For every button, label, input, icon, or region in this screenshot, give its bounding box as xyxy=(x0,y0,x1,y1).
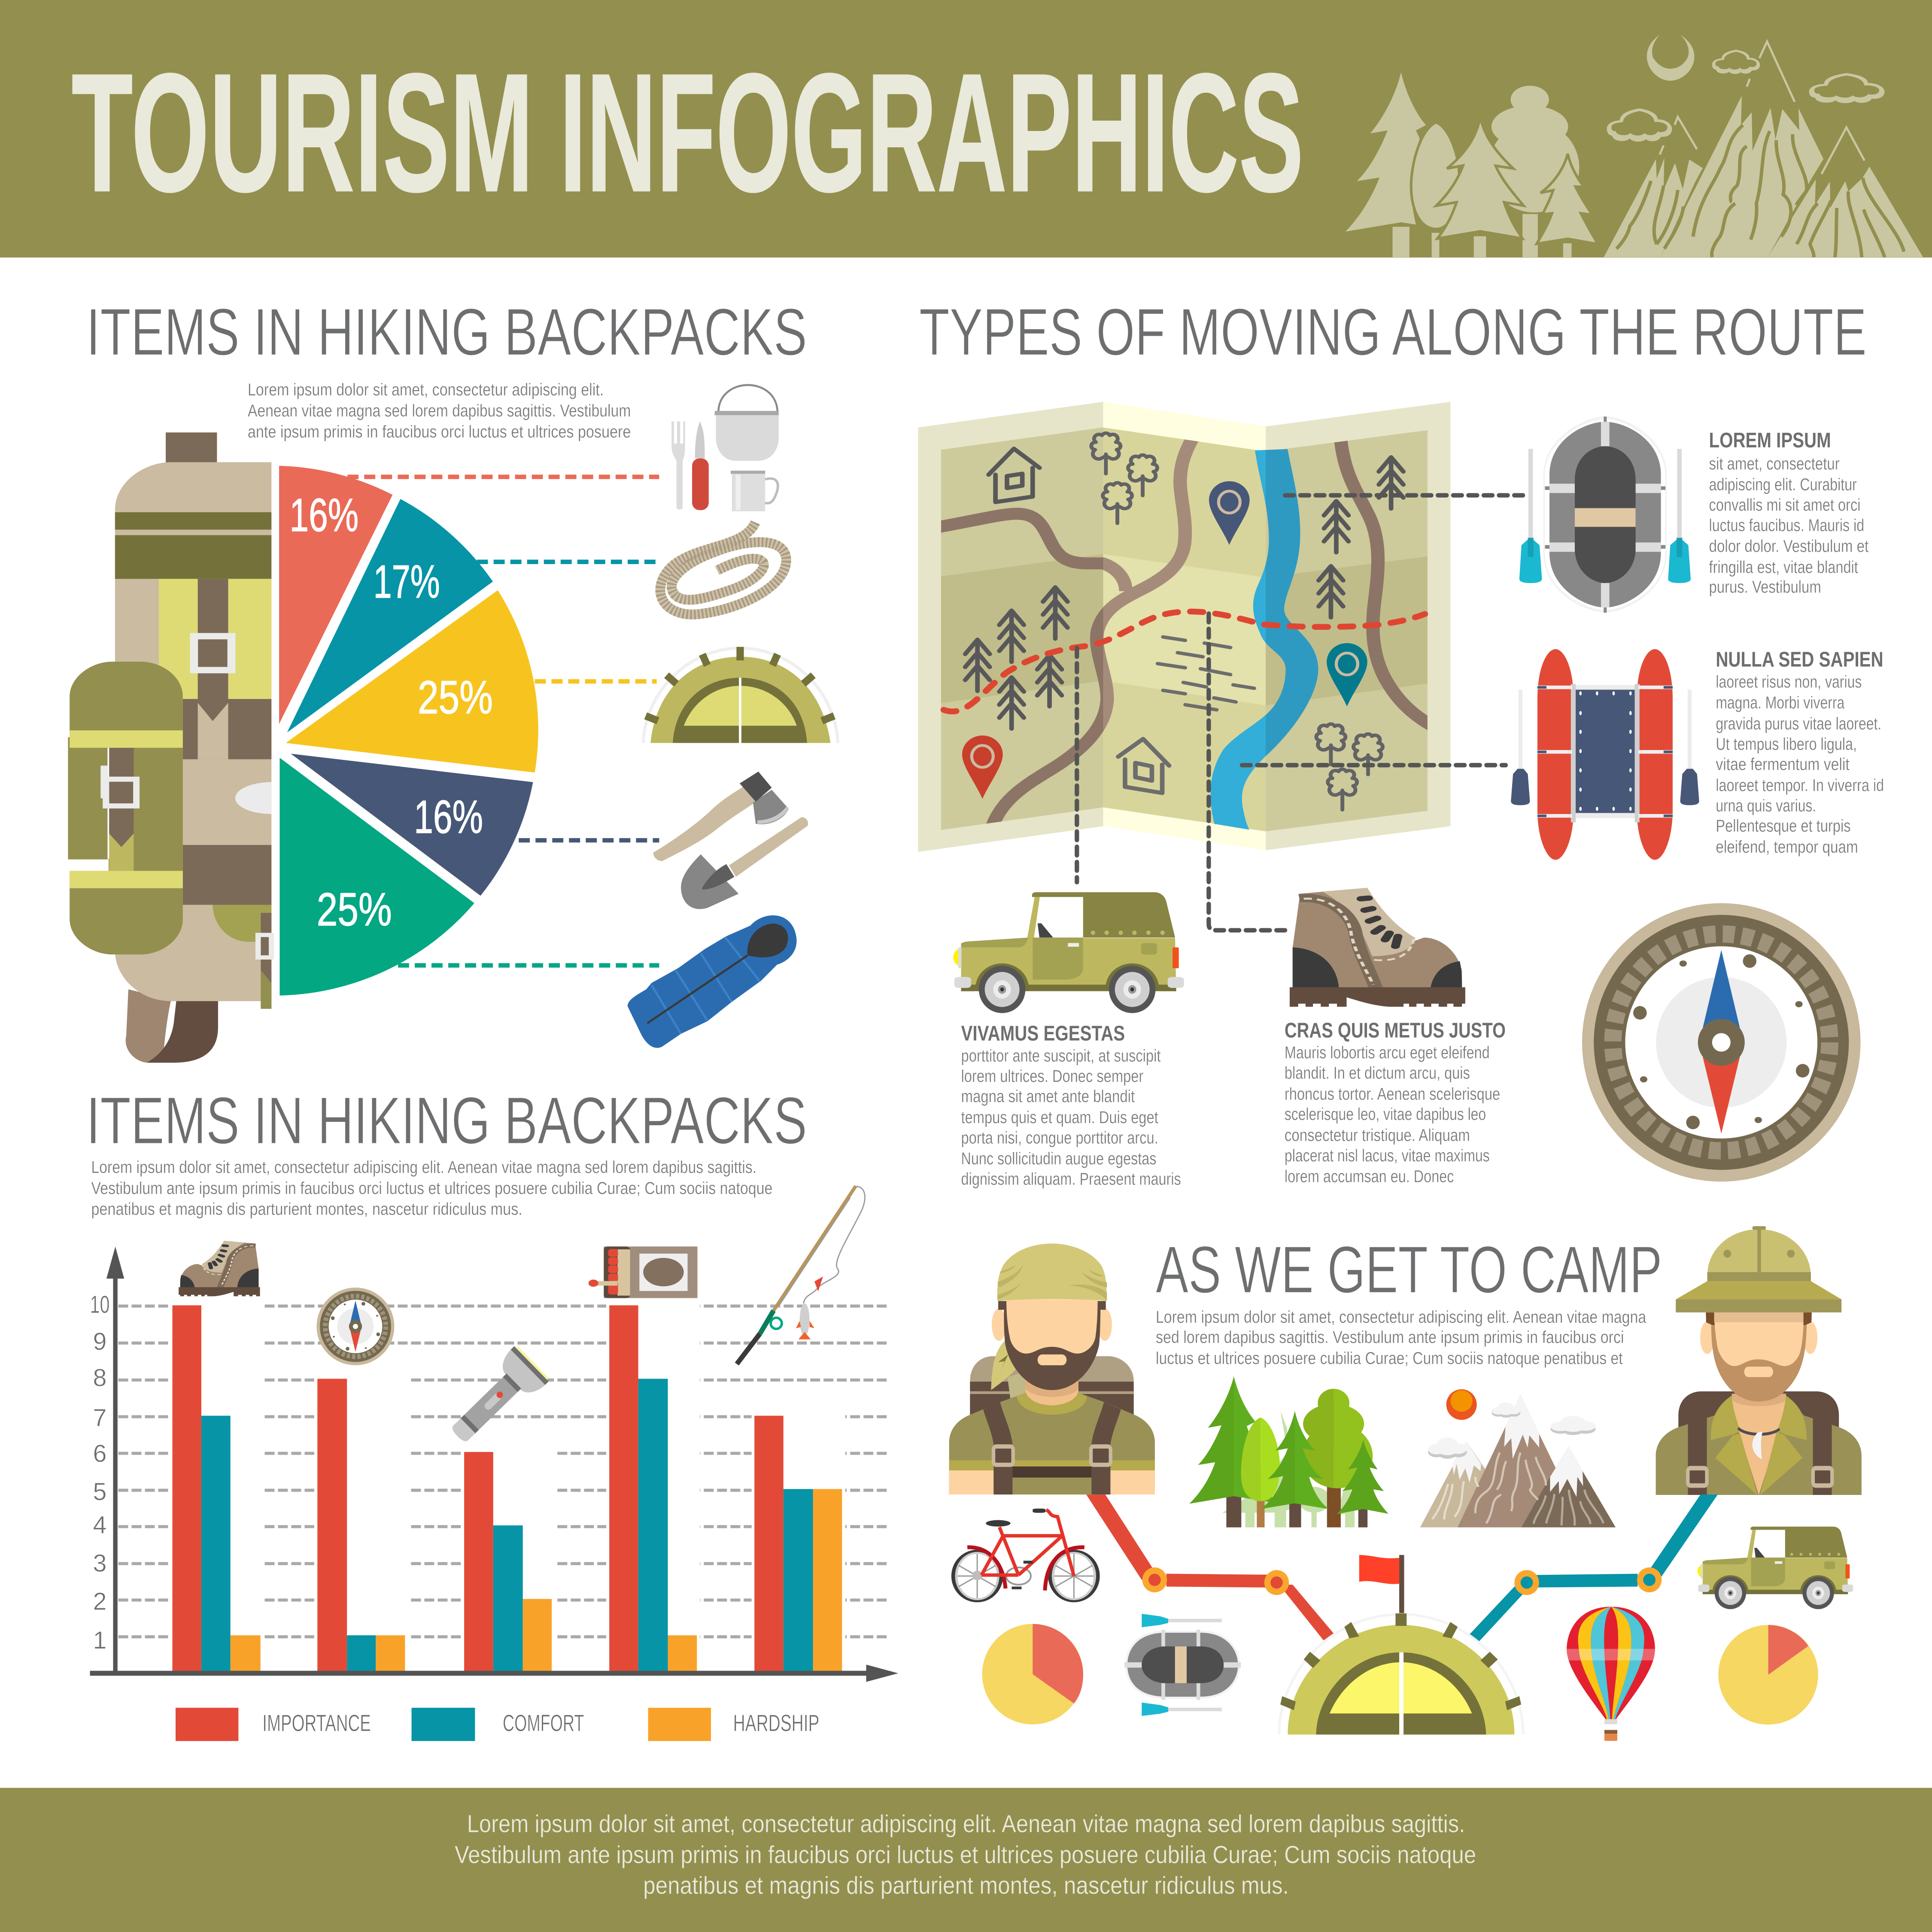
map pin teal xyxy=(1327,643,1367,706)
header illustration: forest silhouettes xyxy=(1346,73,1598,257)
y axis numbers: 10 xyxy=(90,1291,109,1318)
icon: rope coil xyxy=(660,522,786,614)
pie slice 16 percent coral xyxy=(279,466,392,724)
text: vivamus egestas: magna sit amet ante blandit xyxy=(961,1087,1135,1106)
map roads xyxy=(936,438,1434,828)
bar chart intro text xyxy=(91,1157,772,1219)
text: nulla sed sapien: laoreet tempor. In viverra id xyxy=(1716,775,1884,795)
pie slice 25 percent green xyxy=(279,758,474,996)
icon: jeep small xyxy=(1698,1527,1853,1611)
map marsh marks xyxy=(1157,637,1254,710)
bars group 4 xyxy=(609,1305,697,1673)
legend comfort: COMFORT xyxy=(503,1710,584,1736)
mini pie chart left xyxy=(982,1624,1083,1724)
bar chart intro text: Lorem ipsum dolor sit amet, consectetur adipiscing elit. Aenean vitae magna sed lorem dapibus sagittis. xyxy=(91,1157,756,1177)
text: nulla sed sapien xyxy=(1716,648,1884,857)
text: vivamus egestas: lorem ultrices. Donec semper xyxy=(961,1066,1143,1086)
pie slice 25 percent yellow xyxy=(286,590,538,772)
chart icon: compass xyxy=(316,1288,394,1365)
text: nulla sed sapien: eleifend, tempor quam xyxy=(1716,837,1858,857)
footer text xyxy=(455,1810,1476,1899)
chart icon: matchbox xyxy=(589,1246,697,1298)
text: nulla sed sapien: Ut tempus libero ligula, xyxy=(1716,734,1857,753)
text: vivamus egestas: Nunc sollicitudin augue egestas xyxy=(961,1149,1156,1168)
map round trees xyxy=(1091,433,1382,810)
chart icon: boot xyxy=(179,1241,260,1296)
icon: large compass xyxy=(1582,903,1861,1182)
footer text: Vestibulum ante ipsum primis in faucibus orci luctus et ultrices posuere cubilia Curae; Cum sociis natoque xyxy=(455,1841,1476,1868)
icon: tent small xyxy=(643,647,838,743)
text: lorem ipsum: dolor dolor. Vestibulum et xyxy=(1709,537,1868,556)
title: INFOGRAPHICS xyxy=(559,39,1303,227)
map xyxy=(918,402,1450,852)
camp intro text: Lorem ipsum dolor sit amet, consectetur adipiscing elit. Aenean vitae magna xyxy=(1156,1307,1646,1327)
y axis numbers: 5 xyxy=(93,1478,106,1506)
chart legend xyxy=(176,1708,819,1741)
pie label 16 percent: 16% xyxy=(289,489,358,541)
illustration: hiker with bandana xyxy=(949,1244,1155,1495)
y axis numbers: 9 xyxy=(93,1328,106,1355)
icon: grey raft xyxy=(1519,416,1691,613)
text: vivamus egestas: dignissim aliquam. Praesent mauris xyxy=(961,1169,1181,1188)
text: nulla sed sapien: laoreet risus non, varius xyxy=(1716,672,1862,691)
bars group 5 xyxy=(754,1416,842,1673)
map pin navy xyxy=(1209,481,1250,545)
text: cras quis metus justo: Mauris lobortis arcu eget eleifend xyxy=(1285,1043,1490,1062)
text: vivamus egestas: tempus quis et quam. Duis eget xyxy=(961,1108,1158,1127)
legend importance xyxy=(176,1708,371,1741)
icon: sleeping bag xyxy=(628,915,796,1048)
text: lorem ipsum: sit amet, consectetur xyxy=(1709,454,1840,473)
y axis numbers: 7 xyxy=(93,1404,106,1432)
bar chart intro text: penatibus et magnis dis parturient montes, nascetur ridiculus mus. xyxy=(91,1200,522,1219)
icon: large tent xyxy=(1279,1613,1523,1735)
route line red xyxy=(1086,1495,1334,1640)
y axis numbers: 3 xyxy=(93,1550,106,1577)
text: nulla sed sapien: vitae fermentum velit xyxy=(1716,755,1850,774)
text: vivamus egestas: VIVAMUS EGESTAS xyxy=(961,1022,1125,1045)
chart icon: fishing rod with fish xyxy=(737,1186,865,1364)
text: cras quis metus justo xyxy=(1285,1019,1506,1186)
text: cras quis metus justo: blandit. In et dictum arcu, quis xyxy=(1285,1063,1470,1083)
text: nulla sed sapien: NULLA SED SAPIEN xyxy=(1716,648,1883,671)
map houses xyxy=(989,449,1169,793)
legend comfort xyxy=(412,1708,584,1741)
heading: items in hiking backpacks second: ITEMS IN HIKING BACKPACKS xyxy=(86,1083,807,1157)
text: lorem ipsum: fringilla est, vitae blandit xyxy=(1709,558,1858,577)
header band xyxy=(0,0,1932,258)
chart axes xyxy=(90,1246,898,1682)
y axis numbers: 8 xyxy=(93,1364,106,1392)
icon: bicycle xyxy=(951,1509,1100,1602)
text: cras quis metus justo: scelerisque leo, vitae dapibus leo xyxy=(1285,1105,1486,1124)
icon: red catamaran raft xyxy=(1511,649,1699,860)
text: cras quis metus justo: lorem accumsan eu. Donec xyxy=(1285,1167,1454,1186)
y axis numbers: 1 xyxy=(93,1627,106,1654)
route waypoints xyxy=(1142,1567,1662,1595)
bar chart xyxy=(90,1246,898,1682)
heading: items in hiking backpacks: ITEMS IN HIKING BACKPACKS xyxy=(86,295,807,369)
pie chart xyxy=(279,466,538,996)
legend hardship: HARDSHIP xyxy=(733,1710,819,1736)
icon: axe and shovel xyxy=(653,772,808,909)
text: nulla sed sapien: Pellentesque et turpis xyxy=(1716,816,1851,835)
text: lorem ipsum: convallis mi sit amet orci xyxy=(1709,495,1861,515)
text: nulla sed sapien: gravida purus vitae laoreet. xyxy=(1716,714,1881,733)
pie label 25 percent yellow slice: 25% xyxy=(418,671,493,724)
illustration: hiker with safari hat xyxy=(1656,1226,1862,1495)
bar chart intro text: Vestibulum ante ipsum primis in faucibus orci luctus et ultrices posuere cubilia Curae; Cum sociis natoque xyxy=(91,1179,772,1198)
icon: raft top view xyxy=(1124,1614,1241,1716)
camp intro text: luctus et ultrices posuere cubilia Curae; Cum sociis natoque penatibus et xyxy=(1156,1349,1623,1368)
text: vivamus egestas xyxy=(961,1022,1181,1188)
text: lorem ipsum: luctus faucibus. Mauris id xyxy=(1709,516,1864,535)
bars group 1 xyxy=(172,1305,261,1673)
bars group 3 xyxy=(464,1452,552,1673)
backpack intro text: Lorem ipsum dolor sit amet, consectetur adipiscing elit. xyxy=(248,380,604,399)
map pine trees xyxy=(965,457,1403,729)
map pin red xyxy=(962,735,1003,799)
title: TOURISM xyxy=(71,39,534,227)
heading: as we get to camp: AS WE GET TO CAMP xyxy=(1156,1233,1662,1307)
map route dashed line xyxy=(944,611,1425,711)
text: vivamus egestas: porttitor ante suscipit, at suscipit xyxy=(961,1046,1160,1065)
y axis numbers: 2 xyxy=(93,1588,106,1616)
pie label 17 percent: 17% xyxy=(374,556,440,608)
text: vivamus egestas: porta nisi, congue porttitor arcu. xyxy=(961,1128,1158,1147)
pie label 25 percent green slice: 25% xyxy=(317,883,392,936)
text: nulla sed sapien: magna. Morbi viverra xyxy=(1716,693,1845,712)
y axis numbers xyxy=(90,1291,109,1654)
text: nulla sed sapien: urna quis varius. xyxy=(1716,796,1816,815)
pie label 16 percent navy slice: 16% xyxy=(414,791,483,843)
backpack intro text xyxy=(248,380,631,441)
footer text: penatibus et magnis dis parturient montes, nascetur ridiculus mus. xyxy=(643,1872,1289,1899)
text: cras quis metus justo: rhoncus tortor. Aenean scelerisque xyxy=(1285,1084,1500,1103)
legend hardship xyxy=(648,1708,819,1741)
mini pie chart right xyxy=(1718,1625,1818,1725)
pie slice 17 percent teal xyxy=(287,499,493,732)
text: cras quis metus justo: placerat nisl lacus, vitae maximus xyxy=(1285,1146,1490,1165)
map river xyxy=(1211,449,1318,829)
route line teal xyxy=(1470,1495,1718,1641)
backpack intro text: ante ipsum primis in faucibus orci luctus et ultrices posuere xyxy=(248,422,631,441)
icon: hiking boot xyxy=(1290,888,1465,1007)
camp intro text: sed lorem dapibus sagittis. Vestibulum ante ipsum primis in faucibus orci xyxy=(1156,1327,1624,1347)
legend importance: IMPORTANCE xyxy=(262,1710,371,1736)
dashed connectors from map to transport xyxy=(1077,495,1524,930)
chart icon: flashlight xyxy=(440,1345,550,1454)
y axis numbers: 4 xyxy=(93,1512,106,1539)
pie slice 16 percent navy xyxy=(291,754,533,896)
text: lorem ipsum: purus. Vestibulum xyxy=(1709,577,1821,596)
text: cras quis metus justo: CRAS QUIS METUS JUSTO xyxy=(1285,1019,1506,1042)
text: cras quis metus justo: consectetur tristique. Aliquam xyxy=(1285,1126,1470,1145)
bars group 2 xyxy=(317,1379,405,1672)
map paper xyxy=(918,402,1450,852)
icon: jeep xyxy=(953,892,1184,1015)
text: lorem ipsum: adipiscing elit. Curabitur xyxy=(1709,475,1857,494)
dashed leader lines from pie to items xyxy=(347,477,659,966)
illustration: mountains with sun and clouds xyxy=(1420,1389,1616,1528)
header illustration: mountains, moon and clouds xyxy=(1604,35,1923,257)
backpack intro text: Aenean vitae magna sed lorem dapibus sagittis. Vestibulum xyxy=(248,401,631,420)
icon: cutlery, pot and mug xyxy=(671,385,779,511)
text: lorem ipsum: LOREM IPSUM xyxy=(1709,429,1831,452)
y axis numbers: 6 xyxy=(93,1440,106,1467)
footer band xyxy=(0,1788,1932,1932)
text: lorem ipsum xyxy=(1709,429,1868,596)
backpack illustration xyxy=(68,432,271,1063)
illustration: green forest xyxy=(1189,1376,1388,1528)
footer text: Lorem ipsum dolor sit amet, consectetur adipiscing elit. Aenean vitae magna sed lorem dapibus sagittis. xyxy=(467,1810,1465,1838)
icon: flag on tent xyxy=(1359,1555,1404,1613)
icon: hot air balloon xyxy=(1567,1607,1655,1741)
camp intro text xyxy=(1156,1307,1646,1368)
